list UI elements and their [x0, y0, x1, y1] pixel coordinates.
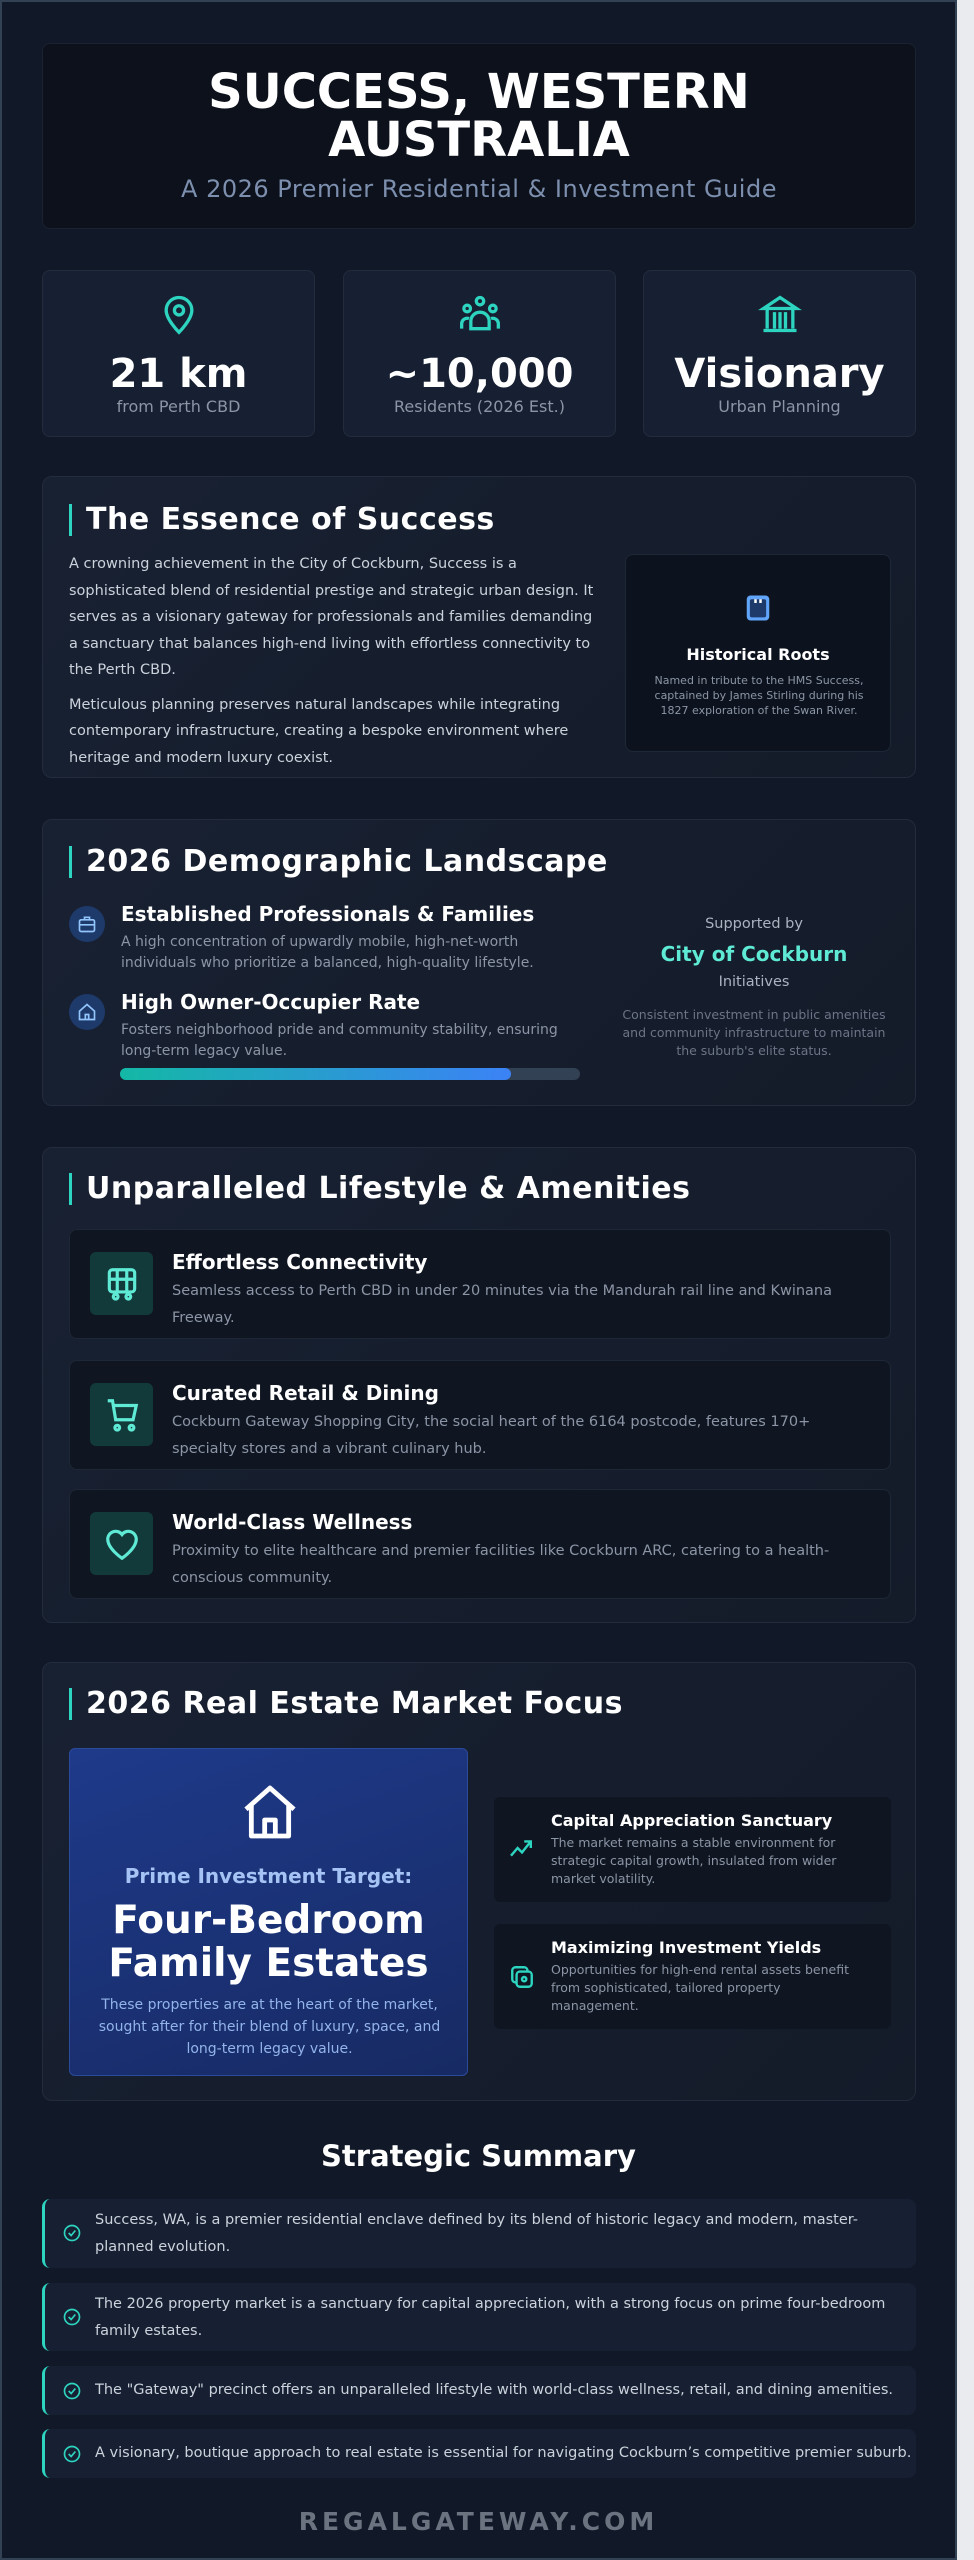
summary item 2: The 2026 property market is a sanctuary for capital appreciation, with a strong focus on prime four-bedroom family estates. — [95, 2296, 885, 2339]
item: wellness: Proximity to elite healthcare and premier facilities like Cockburn ARC, catering to a health-conscious community. — [172, 1543, 829, 1586]
icon: home — [69, 994, 105, 1030]
callout: city of cockburn: Supported by — [705, 916, 803, 932]
icon: check — [64, 2224, 80, 2242]
item: retail: Cockburn Gateway Shopping City, the social heart of the 6164 postcode, features 170+ specialty stores and a vibrant culinary hub. — [172, 1414, 810, 1457]
heading: 2026 Real Estate Market Focus — [86, 1686, 623, 1721]
item: owner-occupier: Fosters neighborhood pride and community stability, ensuring long-term legacy value. — [121, 1022, 558, 1059]
heading: 2026 Demographic Landscape — [86, 844, 608, 879]
subtitle: A 2026 Premier Residential & Investment Guide — [181, 175, 777, 203]
summary item 4: A visionary, boutique approach to real estate is essential for navigating Cockburn’s competitive premier suburb. — [95, 2445, 911, 2461]
item: retail: Curated Retail & Dining — [172, 1381, 439, 1405]
footer: REGALGATEWAY.COM — [299, 2507, 658, 2536]
stat: planning: Visionary — [674, 351, 885, 397]
card: prime investment: Four-Bedroom — [112, 1898, 425, 1943]
item: owner-occupier — [69, 990, 558, 1059]
callout: city of cockburn: Initiatives — [719, 974, 789, 990]
icon: check — [64, 2446, 80, 2462]
card: prime investment — [69, 1748, 468, 2076]
item: owner-occupier: High Owner-Occupier Rate — [121, 990, 420, 1014]
title — [208, 64, 750, 168]
callout: historical roots — [625, 554, 891, 752]
panel: market — [42, 1662, 916, 2101]
stat: distance: from Perth CBD — [117, 397, 240, 416]
text block: A crowning achievement in the City of Cockburn, Success is a sophisticated blend of residential prestige and strategic urban design. It serves as a visionary gateway for professionals and families demanding a sanctuary that balances high-end living with effortless connectivity to the Perth CBD. Meticulous planning preserves natural landscapes while integrating contemporary infrastructure, creating a bespoke environment where heritage and modern luxury coexist. — [69, 556, 593, 766]
card: investment yields — [494, 1924, 891, 2029]
item: connectivity: Seamless access to Perth CBD in under 20 minutes via the Mandurah rail line and Kwinana Freeway. — [172, 1283, 832, 1326]
item: professionals — [69, 902, 534, 971]
icon: check — [64, 2382, 80, 2400]
header — [42, 43, 916, 229]
panel: essence — [42, 476, 916, 778]
stat: planning — [643, 270, 916, 437]
icon: pin — [164, 296, 194, 334]
title: SUCCESS, WESTERN — [208, 64, 750, 120]
stat: distance: 21 km — [110, 351, 247, 397]
item: retail — [69, 1360, 891, 1470]
stat: residents: Residents (2026 Est.) — [394, 397, 565, 416]
icon: house — [244, 1786, 296, 1838]
stat: planning: Urban Planning — [718, 397, 841, 416]
card: prime investment: These properties are at the heart of the market, sought after for their blend of luxury, space, and long-term legacy value. — [99, 1997, 440, 2057]
callout: city of cockburn — [622, 916, 886, 1058]
item: professionals: A high concentration of upwardly mobile, high-net-worth individuals who prioritize a balanced, high-quality lifestyle. — [121, 934, 534, 971]
item: connectivity — [69, 1229, 891, 1339]
icon: people — [460, 296, 500, 330]
card: capital appreciation — [494, 1797, 891, 1902]
icon: ship — [746, 596, 770, 620]
icon: train — [90, 1252, 153, 1315]
icon: trend — [510, 1840, 532, 1856]
heading: strategic summary: Strategic Summary — [321, 2139, 636, 2173]
item: wellness — [69, 1489, 891, 1599]
card: investment yields: Maximizing Investment Yields — [551, 1938, 821, 1957]
card: capital appreciation: Capital Appreciation Sanctuary — [551, 1811, 832, 1830]
icon: briefcase — [69, 906, 105, 942]
callout: historical roots: Historical Roots — [686, 645, 830, 664]
stat: residents — [343, 270, 616, 437]
title: AUSTRALIA — [328, 112, 630, 168]
stat: distance — [42, 270, 315, 437]
item: professionals: Established Professionals & Families — [121, 902, 534, 926]
summary item 3: The "Gateway" precinct offers an unparalleled lifestyle with world-class wellness, retail, and dining amenities. — [95, 2382, 893, 2398]
icon: money — [511, 1966, 533, 1988]
summary item 3 — [42, 2366, 916, 2415]
callout: city of cockburn: Consistent investment in public amenities and community infrastructure to maintain the suburb's elite status. — [622, 1007, 886, 1058]
item: wellness: World-Class Wellness — [172, 1510, 412, 1534]
panel: demographics — [42, 819, 916, 1106]
progress bar — [120, 1068, 580, 1080]
icon: heart — [90, 1512, 153, 1575]
heading: Unparalleled Lifestyle & Amenities — [86, 1171, 690, 1206]
panel: lifestyle — [42, 1147, 916, 1623]
icon: cart — [90, 1383, 153, 1446]
callout: city of cockburn: City of Cockburn — [661, 942, 847, 966]
heading: The Essence of Success — [86, 502, 495, 537]
summary item 1 — [42, 2199, 916, 2268]
icon: building — [758, 296, 802, 332]
summary item 2 — [42, 2283, 916, 2351]
callout: historical roots: Named in tribute to the HMS Success, captained by James Stirling during his 1827 exploration of the Swan River. — [654, 674, 863, 717]
card: capital appreciation: The market remains a stable environment for strategic capital growth, insulated from wider market volatility. — [551, 1835, 836, 1886]
item: connectivity: Effortless Connectivity — [172, 1250, 427, 1274]
summary item 1: Success, WA, is a premier residential enclave defined by its blend of historic legacy and modern, master-planned evolution. — [95, 2212, 858, 2255]
stat: residents: ~10,000 — [386, 351, 573, 397]
summary item 4 — [42, 2429, 916, 2478]
icon: check — [64, 2308, 80, 2326]
card: prime investment: Family Estates — [108, 1941, 429, 1986]
card: prime investment: Prime Investment Target: — [125, 1864, 412, 1888]
card: investment yields: Opportunities for high-end rental assets benefit from sophisticated, tailored property management. — [551, 1962, 849, 2013]
